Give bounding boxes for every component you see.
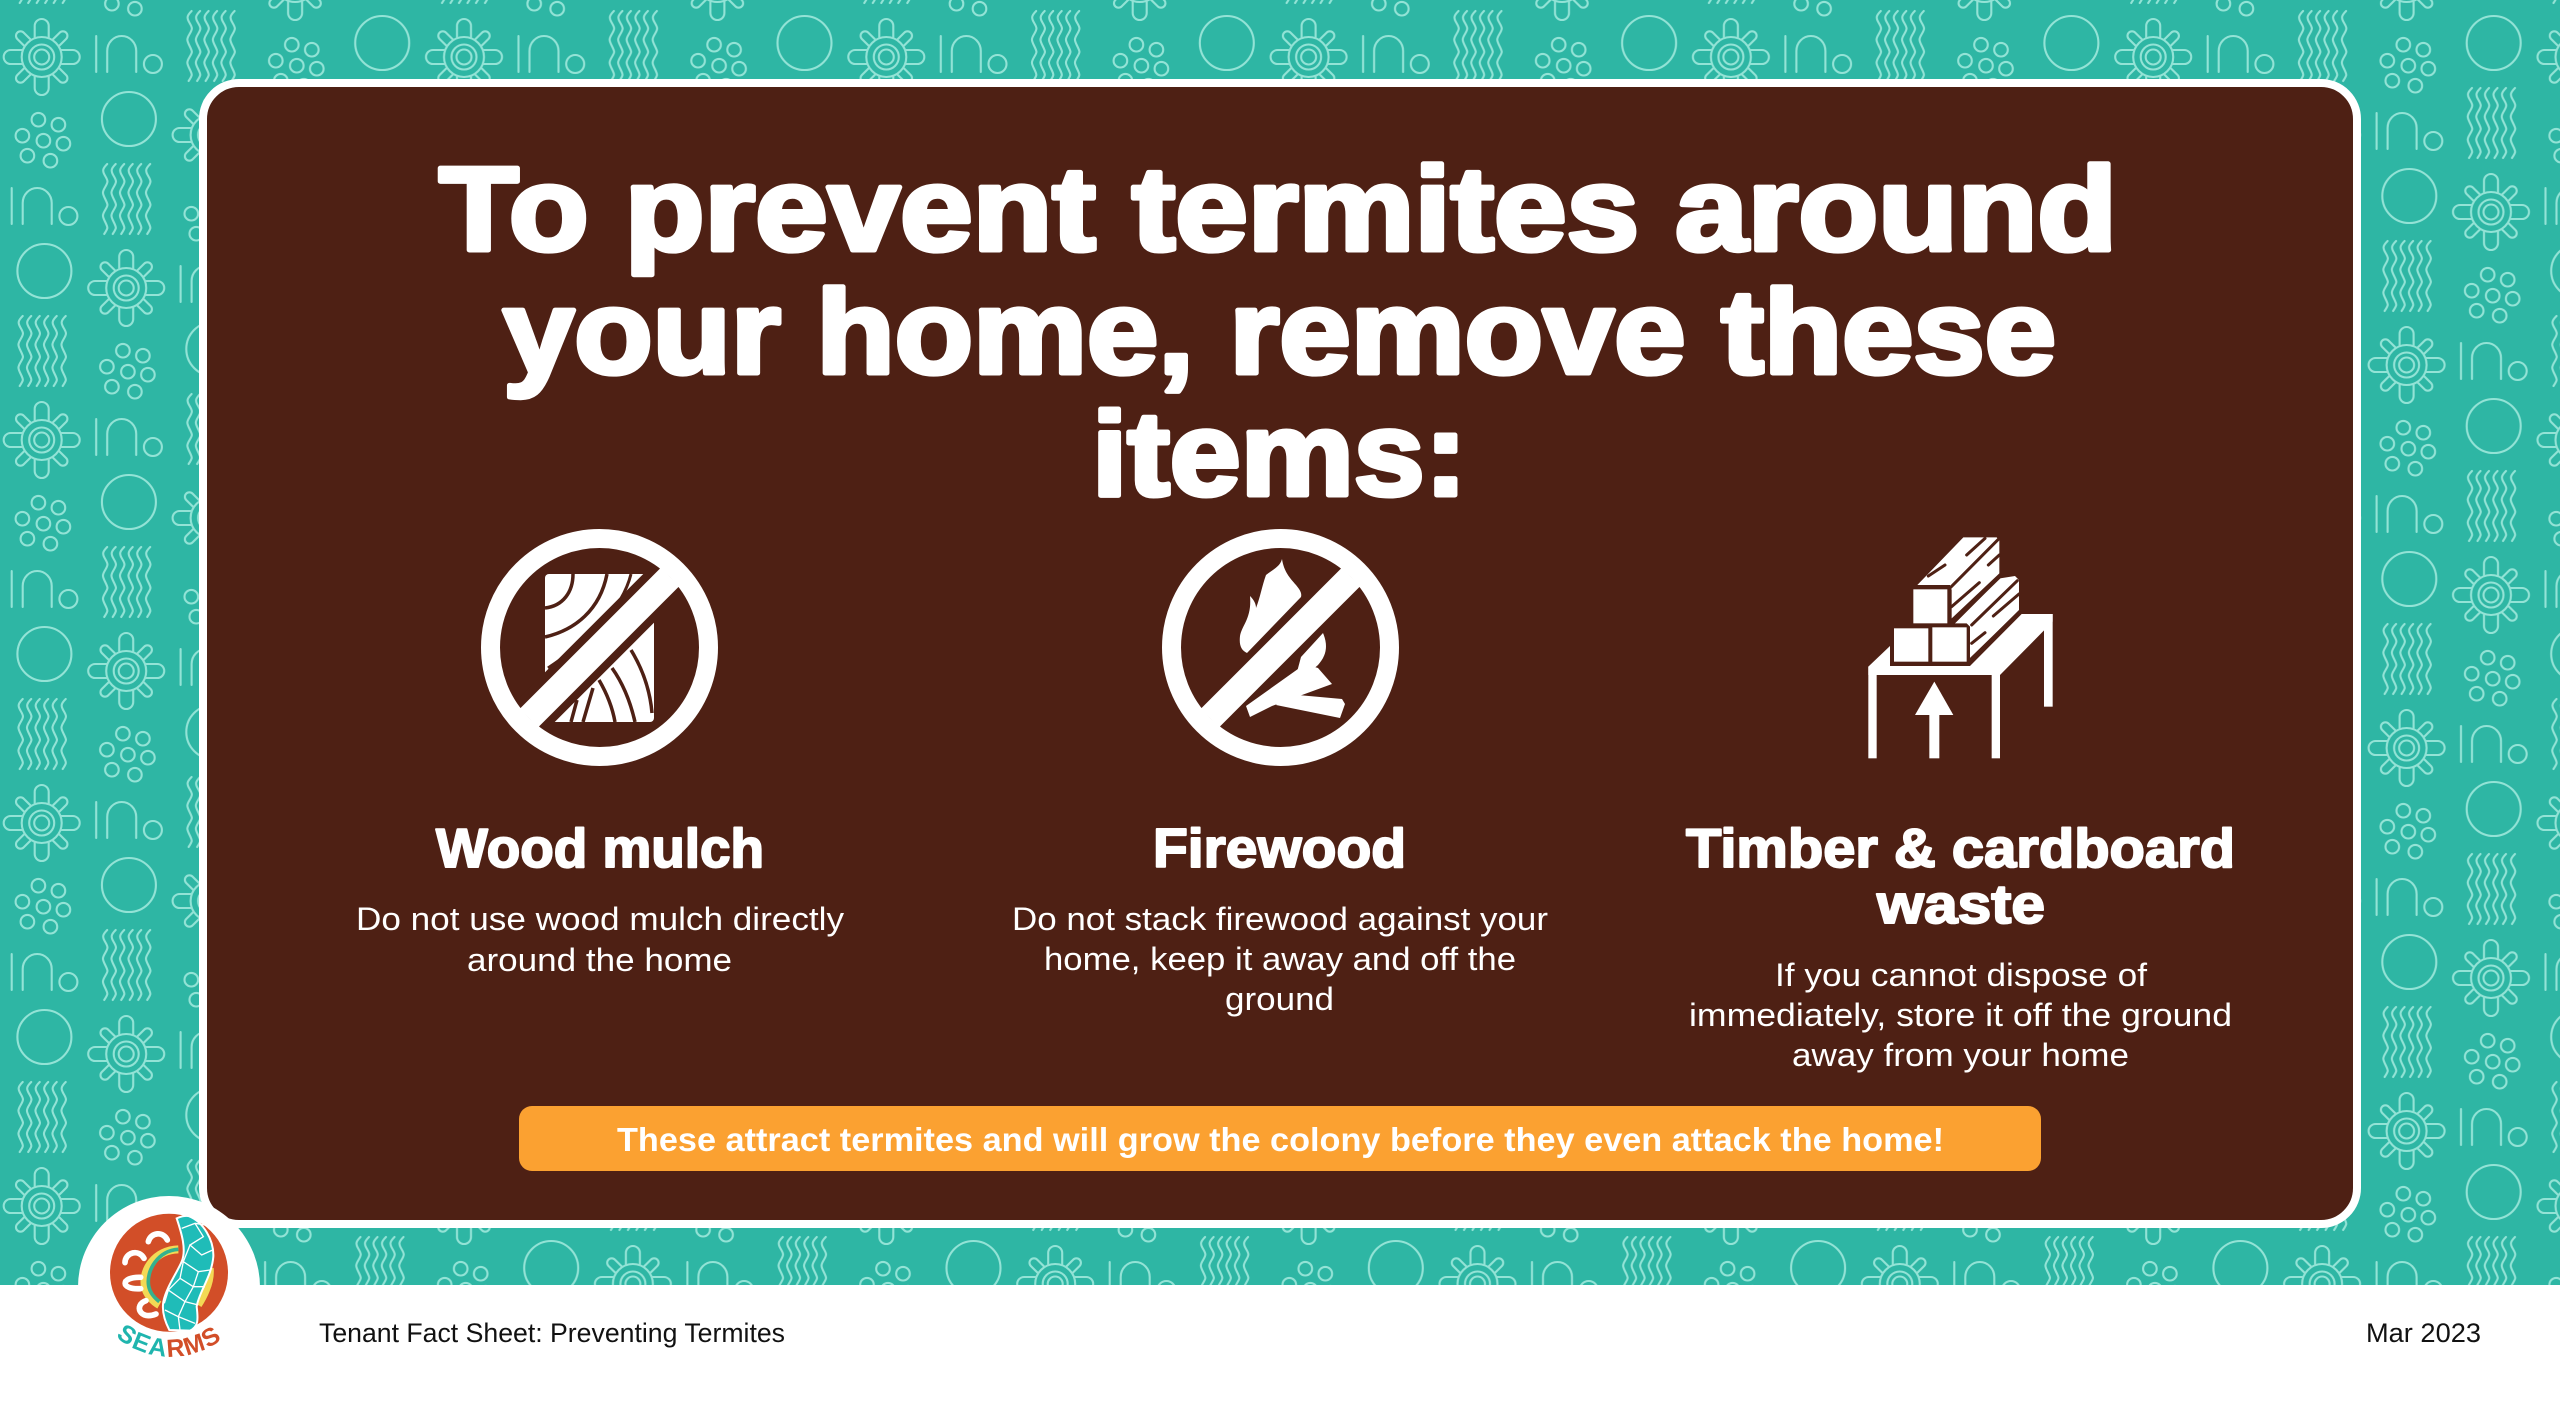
title: your home, remove these: [503, 266, 2056, 399]
column: wood mulch: [356, 538, 844, 978]
icon: timber stored on table: [1868, 537, 2053, 758]
heading: timber and cardboard waste: waste: [1876, 873, 2045, 935]
text: wood mulch advice: around the home: [467, 942, 732, 978]
footer white strip: [0, 1285, 2560, 1422]
heading: firewood: Firewood: [1153, 817, 1406, 879]
text: firewood advice: [1012, 901, 1548, 1017]
column: timber and cardboard waste: [1686, 537, 2235, 1073]
text: firewood advice: ground: [1225, 981, 1334, 1017]
callout: orange warning bar: These attract termites and will grow the colony before they even attack the home!: [617, 1121, 1944, 1158]
icon: wood mulch prohibited: [490, 538, 708, 756]
text: wood mulch advice: Do not use wood mulch directly: [356, 901, 844, 937]
text: firewood advice: Do not stack firewood against your: [1012, 901, 1548, 937]
title: To prevent termites around: [439, 143, 2117, 276]
column: firewood: [1012, 538, 1548, 1017]
text: wood mulch advice: [356, 901, 844, 978]
footer date: Mar 2023: [2366, 1318, 2481, 1348]
callout: orange warning bar: [519, 1106, 2041, 1171]
text: timber advice: immediately, store it off the ground: [1689, 997, 2232, 1033]
text: firewood advice: home, keep it away and off the: [1044, 941, 1516, 977]
heading: timber and cardboard waste: [1686, 817, 2235, 935]
logo: SEARMS: [78, 1196, 260, 1357]
logo: SEARMS: SEARMS: [118, 1325, 220, 1357]
title: [439, 143, 2117, 521]
text: timber advice: [1689, 957, 2232, 1073]
main brown panel: [203, 83, 2357, 1224]
heading: timber and cardboard waste: Timber & cardboard: [1686, 817, 2235, 879]
text: timber advice: away from your home: [1792, 1037, 2129, 1073]
text: timber advice: If you cannot dispose of: [1775, 957, 2147, 993]
footer title: Tenant Fact Sheet: Preventing Termites: [319, 1318, 785, 1348]
icon: firewood prohibited: [1172, 538, 1390, 756]
heading: wood mulch: Wood mulch: [436, 817, 764, 879]
title: items:: [1092, 388, 1467, 521]
